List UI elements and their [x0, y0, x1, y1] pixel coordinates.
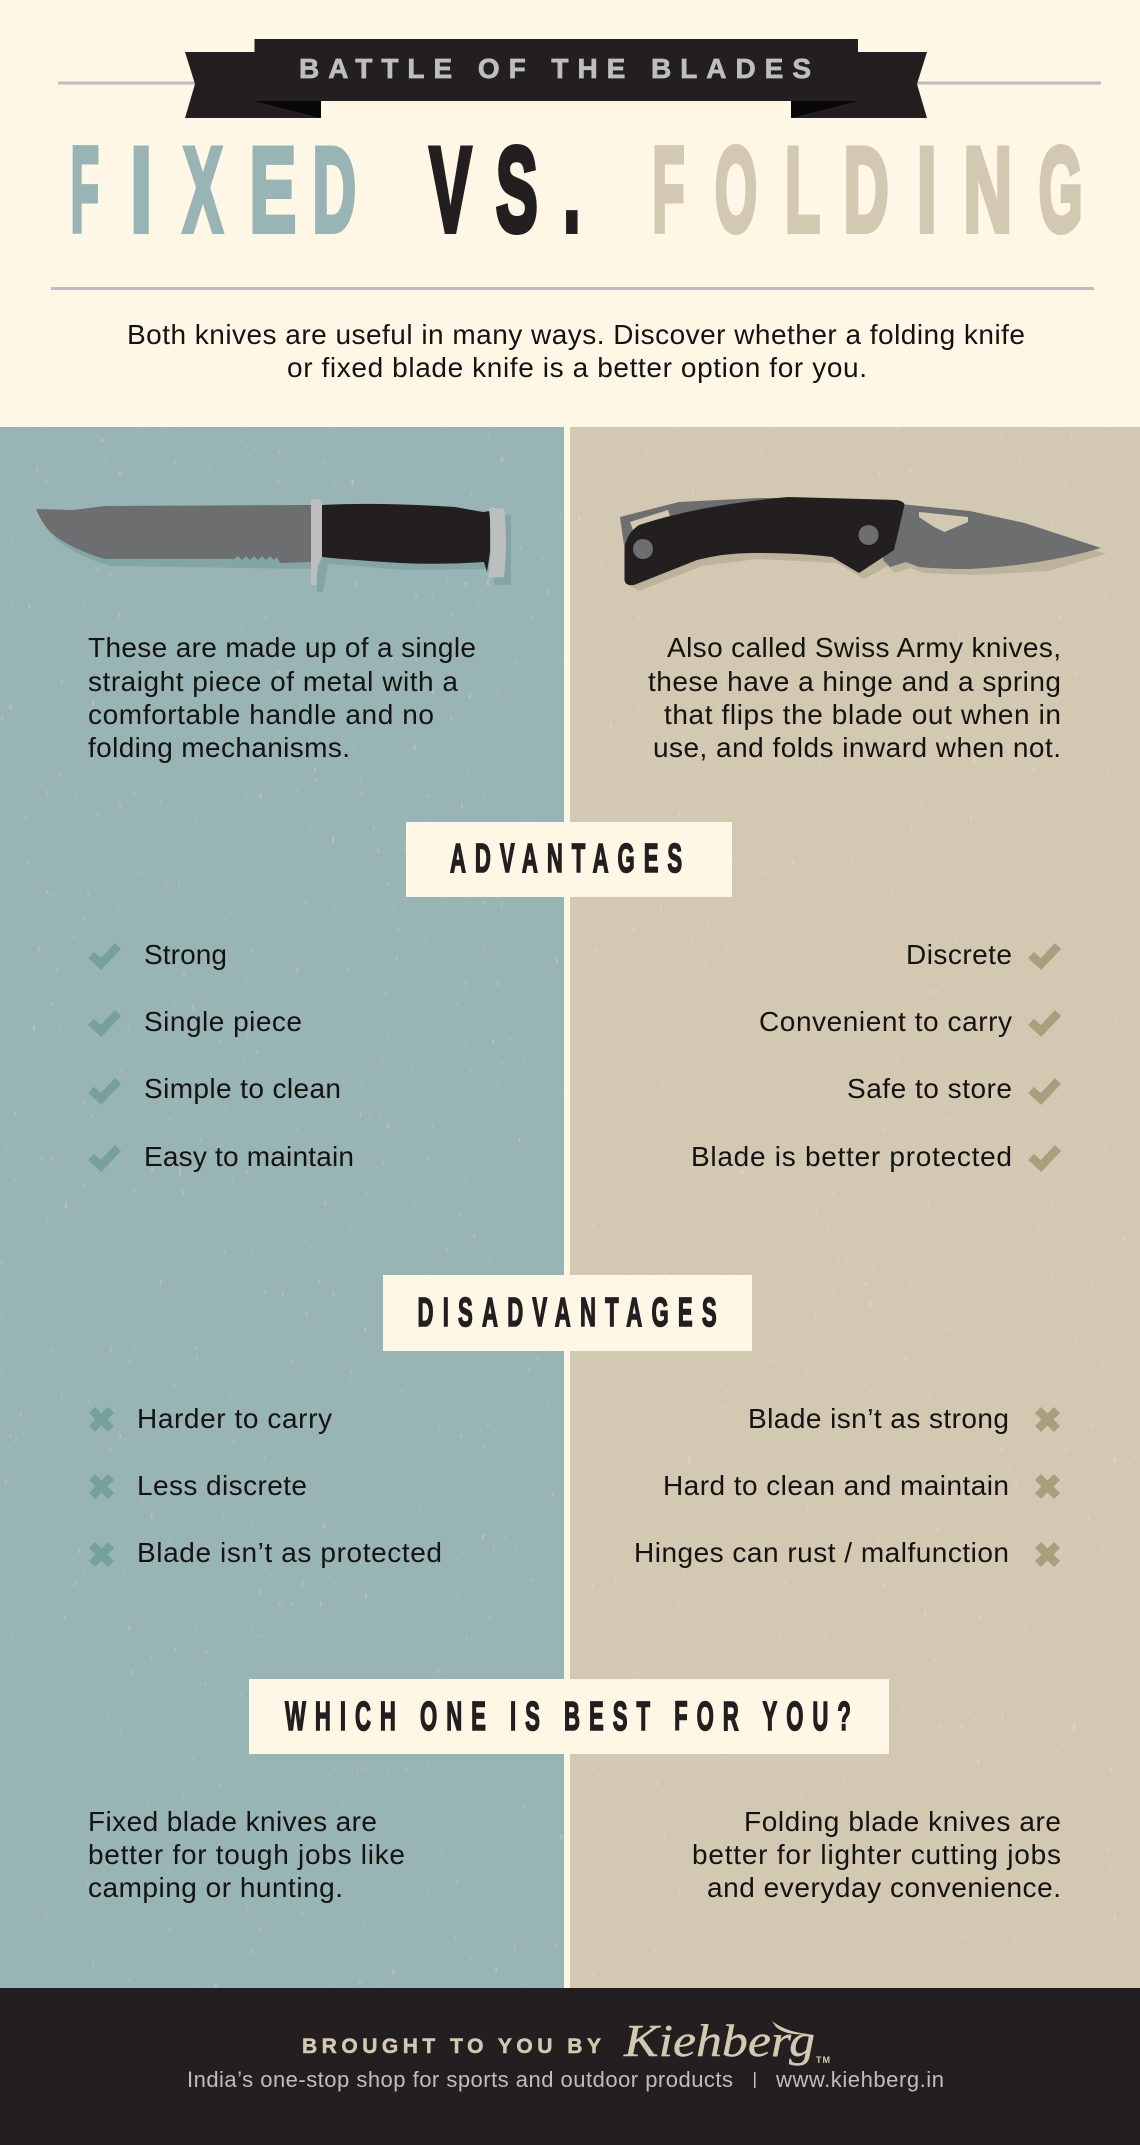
brought to you by: BROUGHT TO YOU BY: [302, 2035, 601, 2058]
item: hinges can rust: Hinges can rust / malfunction: [634, 1537, 1009, 1568]
blade: [36, 505, 311, 563]
word: fixed: E: [250, 122, 296, 257]
word: folding: O: [715, 123, 757, 257]
right description: that flips the blade out when in: [664, 699, 1061, 730]
right description: [648, 632, 1061, 763]
banner text: BATTLE OF THE BLADES: [299, 53, 811, 84]
handle: [624, 497, 905, 585]
disadvantages: folding: [634, 1403, 1057, 1568]
item: discrete: [906, 939, 1058, 970]
blade hole: [919, 512, 968, 532]
item: convenient to carry: Convenient to carry: [759, 1006, 1012, 1037]
left description: comfortable handle and no: [88, 699, 434, 730]
verdict: folding: Folding blade knives are: [744, 1806, 1061, 1837]
panel: folding knife column background: [570, 427, 1140, 1988]
item: less discrete: Less discrete: [137, 1470, 307, 1501]
intro text: [127, 319, 1025, 383]
word: folding: N: [964, 122, 1012, 257]
pommel: [488, 508, 506, 578]
footer: [0, 1988, 1140, 2145]
verdict: fixed: camping or hunting.: [88, 1872, 343, 1903]
word: fixed: I: [130, 123, 152, 257]
item: hard to clean and maintain: Hard to clean and maintain: [663, 1470, 1009, 1501]
url: www.kiehberg.in: [775, 2067, 944, 2092]
word: vs.: [430, 123, 580, 258]
advantages: fixed: [91, 939, 354, 1172]
title: fixed vs. folding: [71, 122, 1083, 258]
guard: [311, 499, 322, 585]
heading: advantages: [406, 822, 732, 897]
advantages: folding: [691, 939, 1058, 1172]
word: folding: D: [844, 123, 889, 257]
heading: which one is best for you: [249, 1679, 889, 1754]
item: simple to clean: Simple to clean: [144, 1073, 341, 1104]
word: vs.: .: [564, 123, 580, 258]
panel: fixed blade column background: [0, 427, 564, 1988]
word: fixed: F: [71, 124, 99, 257]
word: fixed: D: [313, 123, 356, 258]
item: harder to carry: Harder to carry: [137, 1403, 332, 1434]
verdict: folding: and everyday convenience.: [707, 1872, 1061, 1903]
verdict: fixed: better for tough jobs like: [88, 1839, 405, 1870]
word: fixed: X: [183, 123, 222, 258]
left description: folding mechanisms.: [88, 732, 350, 763]
separator: [754, 2072, 756, 2088]
logo: kiehberg: Kiehberg: [623, 2015, 815, 2066]
item: blade is better protected: Blade is better protected: [691, 1141, 1012, 1172]
verdict: folding: better for lighter cutting jobs: [692, 1839, 1061, 1870]
left description: [88, 632, 476, 763]
item: strong: [91, 939, 227, 970]
logo: kiehberg: TM: [816, 2055, 830, 2065]
word: folding: [652, 122, 1083, 257]
item: blade isn't as strong: Blade isn’t as strong: [748, 1403, 1009, 1434]
item: discrete: Discrete: [906, 939, 1012, 970]
intro text: Both knives are useful in many ways. Discover whether a folding knife: [127, 319, 1025, 350]
verdict: folding: [692, 1806, 1061, 1903]
left description: These are made up of a single: [88, 632, 476, 663]
icon: fixed blade knife: [36, 499, 511, 592]
banner ribbon: [185, 39, 927, 118]
word: folding: F: [652, 122, 685, 257]
intro text: or fixed blade knife is a better option for you.: [287, 352, 867, 383]
right description: use, and folds inward when not.: [653, 732, 1061, 763]
pivot pins: [633, 525, 878, 559]
right description: these have a hinge and a spring: [648, 666, 1061, 697]
word: fixed: [71, 122, 356, 258]
verdict: fixed: Fixed blade knives are: [88, 1806, 377, 1837]
heading: which one is best for you: WHICH ONE IS BEST FOR YOU?: [285, 1693, 851, 1739]
item: safe to store: Safe to store: [847, 1073, 1012, 1104]
right description: Also called Swiss Army knives,: [667, 632, 1061, 663]
icon: folding knife: [620, 497, 1106, 591]
heading: disadvantages: DISADVANTAGES: [418, 1289, 717, 1335]
item: blade isn't as protected: Blade isn’t as protected: [137, 1537, 442, 1568]
left description: straight piece of metal with a: [88, 666, 458, 697]
word: folding: I: [917, 122, 937, 256]
heading: advantages: ADVANTAGES: [450, 835, 682, 881]
item: single piece: Single piece: [144, 1006, 302, 1037]
word: vs.: S: [496, 123, 538, 257]
spine opening: [630, 510, 670, 530]
blade: [883, 504, 1101, 569]
heading: disadvantages: [383, 1275, 752, 1351]
disadvantages: fixed: [92, 1403, 442, 1568]
item: strong: Strong: [144, 939, 227, 970]
item: easy to maintain: Easy to maintain: [144, 1141, 354, 1172]
verdict: fixed: [88, 1806, 405, 1903]
center divider: [564, 427, 570, 1988]
word: folding: L: [785, 123, 820, 256]
back spine: [620, 498, 790, 552]
handle: [322, 504, 490, 572]
tagline: India’s one-stop shop for sports and outdoor products: [187, 2067, 733, 2092]
word: folding: G: [1039, 122, 1083, 257]
header section: [51, 39, 1101, 383]
word: vs.: V: [430, 123, 471, 257]
